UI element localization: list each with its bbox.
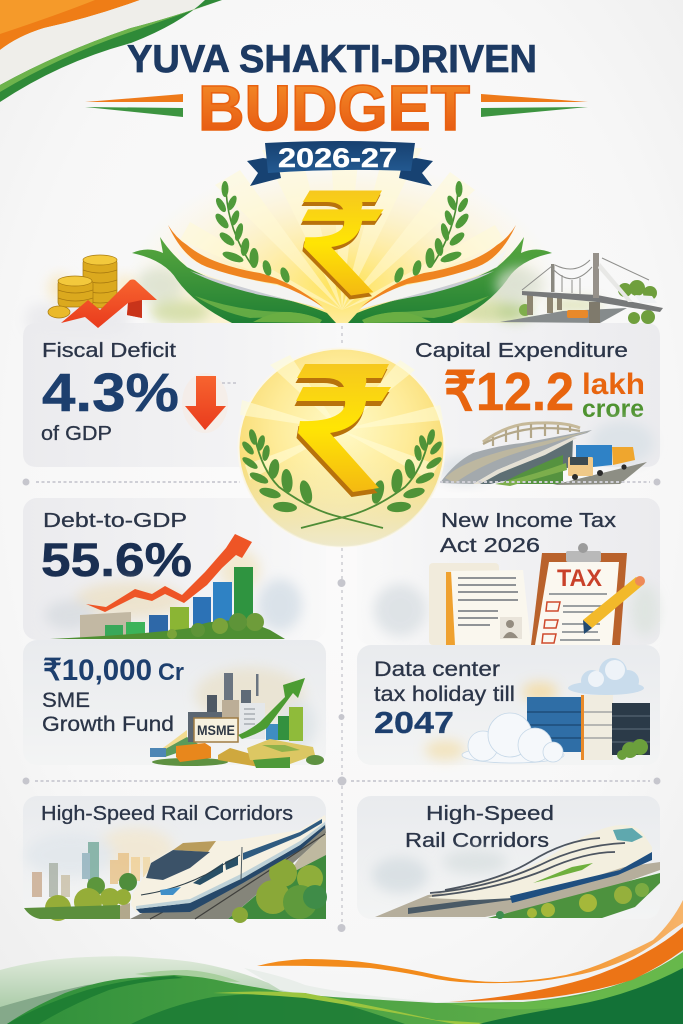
sunburst glow	[127, 130, 557, 380]
illustration: flyover and truck	[437, 421, 654, 486]
illustration: tax documents	[374, 543, 659, 645]
sign: MSME: MSME	[197, 722, 235, 738]
unit: crore: crore	[582, 395, 644, 423]
icon: coins and rising arrow	[48, 255, 157, 328]
heading: Yuva Shakti-Driven: YUVA SHAKTI-DRIVEN	[127, 38, 537, 81]
illustration: bullet train and skyline	[24, 815, 327, 923]
left laurel	[213, 181, 291, 284]
label: new income tax act: Act 2026	[440, 535, 540, 557]
panel: debt-to-GDP	[23, 498, 326, 640]
label: SME growth fund: Growth Fund	[42, 713, 174, 736]
panel: high-speed rail right	[357, 796, 660, 919]
label: of GDP: of GDP	[41, 423, 112, 445]
panel: central gold medallion	[238, 348, 444, 546]
label: capital expenditure: Capital Expenditure	[415, 340, 628, 362]
panel: fiscal deficit	[23, 323, 343, 467]
icon: large gold rupee	[301, 190, 384, 300]
label: debt-to-GDP: Debt-to-GDP	[43, 510, 187, 532]
medallion laurel right	[301, 428, 444, 528]
label: data center tax holiday: tax holiday till	[374, 683, 515, 706]
decoration: left title rule	[85, 94, 183, 117]
label: new income tax act: New Income Tax	[441, 510, 616, 532]
panel: new income tax act	[357, 498, 660, 645]
value: 55.6 percent: 55.6%	[41, 533, 192, 586]
illustration: streamlined train	[372, 825, 660, 919]
label: high-speed rail corridors: High-Speed	[426, 803, 554, 825]
illustration: suspension bridge	[496, 253, 663, 324]
title	[85, 38, 588, 144]
illustration: MSME factory and money	[150, 667, 324, 768]
value: 4.3 percent: 4.3%	[42, 363, 179, 423]
icon: down arrow	[182, 373, 228, 433]
label: high-speed rail corridors: High-Speed Rail Corridors	[41, 803, 293, 825]
medallion rays	[240, 355, 443, 480]
value: 10,000 crore: Cr	[158, 659, 184, 686]
value: 10,000 crore: ₹10,000	[43, 654, 152, 687]
panel: data center tax holiday	[357, 645, 660, 765]
year ribbon	[247, 141, 433, 186]
right laurel	[393, 181, 471, 284]
label: high-speed rail corridors	[405, 803, 554, 852]
label: fiscal deficit: Fiscal Deficit	[42, 340, 177, 362]
value: 2047: 2047	[374, 705, 454, 740]
label: SME growth fund	[42, 689, 174, 736]
soft grey shelf behind coins	[25, 304, 130, 334]
value: 12.2: ₹12.2	[444, 362, 574, 422]
illustration: rising bar chart	[45, 534, 302, 639]
left wing	[132, 225, 336, 323]
year label: 2026-27	[278, 143, 397, 173]
panel: SME growth fund	[23, 640, 326, 768]
medallion laurel left	[240, 428, 383, 528]
top-left tricolour flag swoosh	[0, 0, 222, 102]
label: high-speed rail corridors: Rail Corridors	[405, 830, 549, 852]
icon: medallion rupee	[294, 364, 391, 497]
label: data center tax holiday: Data center	[374, 658, 500, 681]
illustration: data centre and clouds	[425, 658, 650, 763]
unit: lakh: lakh	[582, 368, 645, 401]
panel: capital expenditure	[342, 323, 660, 486]
right wing	[348, 225, 552, 323]
decoration: right title rule	[481, 94, 588, 117]
heading: Budget: BUDGET	[198, 72, 470, 144]
bottom tricolour wave	[0, 900, 683, 1024]
label: data center tax holiday	[374, 658, 515, 706]
soft foliage behind wings	[136, 267, 528, 324]
label: TAX: TAX	[557, 565, 602, 592]
icon: tricolour book wings	[132, 225, 552, 323]
label: new income tax act	[440, 510, 616, 557]
label: SME growth fund: SME	[42, 689, 90, 712]
icon: top laurels	[213, 181, 471, 284]
panel: high-speed rail left	[23, 796, 327, 923]
